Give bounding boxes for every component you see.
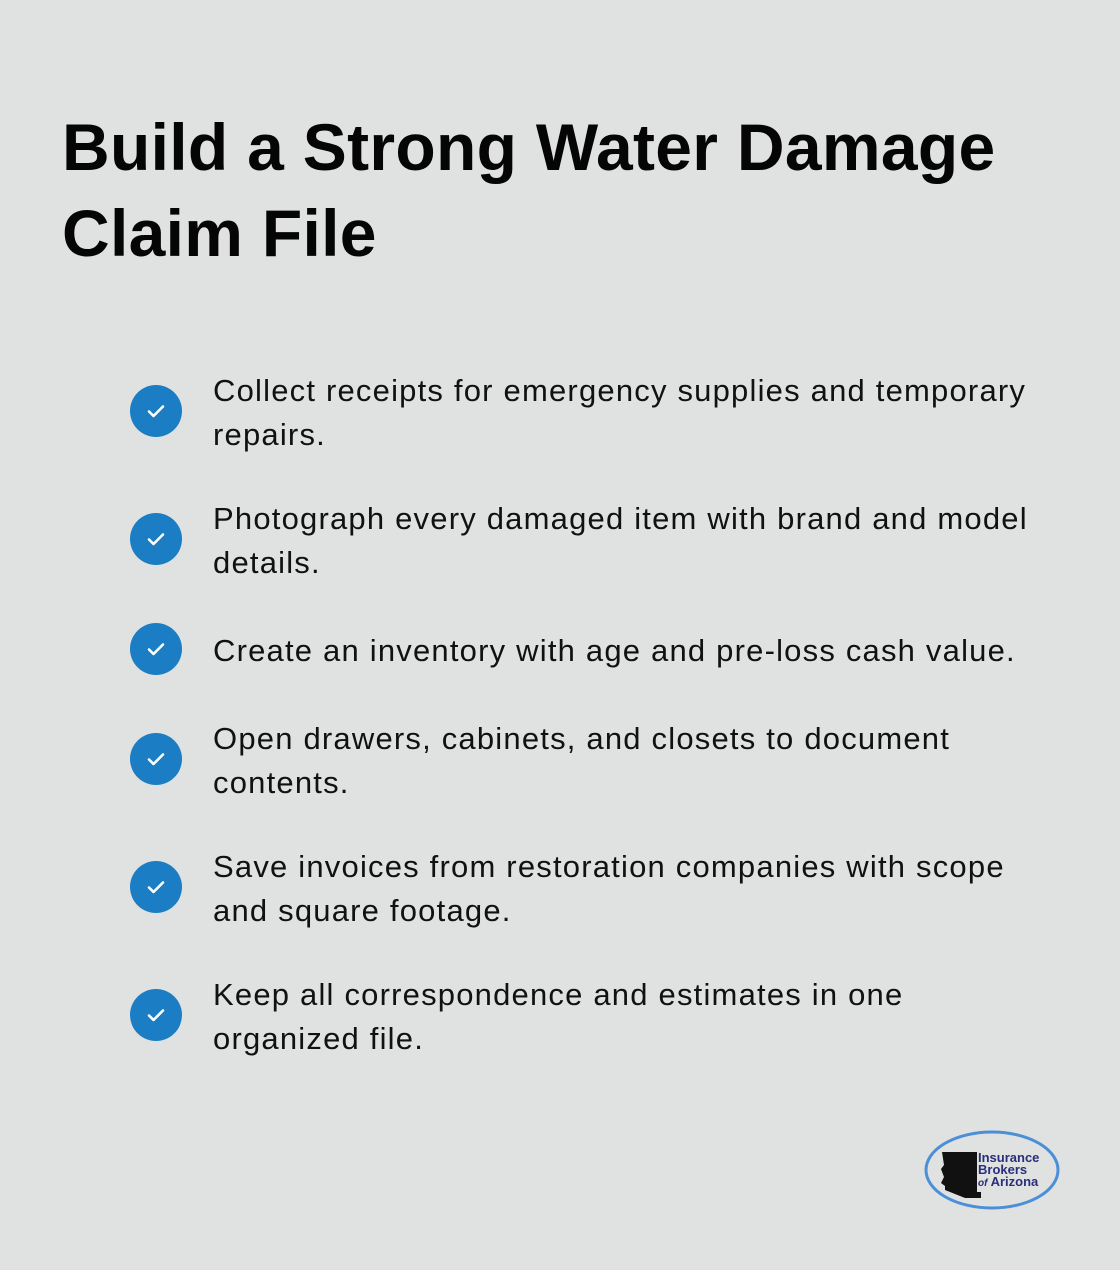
logo: Insurance — [978, 1150, 1039, 1165]
item 6 — [130, 977, 903, 1056]
title: Claim File — [62, 196, 377, 270]
item 4: Open drawers, cabinets, and closets to document — [213, 721, 950, 756]
item 3 — [130, 623, 1016, 675]
title: Build a Strong Water Damage — [62, 110, 995, 184]
item 4: contents. — [213, 765, 350, 800]
title — [62, 110, 995, 270]
logo — [924, 1130, 1060, 1210]
item 6: Keep all correspondence and estimates in one — [213, 977, 903, 1012]
logo: of Arizona — [978, 1174, 1039, 1189]
item 2: details. — [213, 545, 321, 580]
item 5: and square footage. — [213, 893, 512, 928]
item 2 — [130, 501, 1028, 580]
item 1: repairs. — [213, 417, 326, 452]
item 6: organized file. — [213, 1021, 424, 1056]
logo: Brokers — [978, 1162, 1027, 1177]
item 1 — [130, 373, 1026, 452]
item 4 — [130, 721, 950, 800]
item 5 — [130, 849, 1005, 928]
item 5: Save invoices from restoration companies with scope — [213, 849, 1005, 884]
item 1: Collect receipts for emergency supplies and temporary — [213, 373, 1026, 408]
item 2: Photograph every damaged item with brand and model — [213, 501, 1028, 536]
item 3: Create an inventory with age and pre-loss cash value. — [213, 633, 1016, 668]
